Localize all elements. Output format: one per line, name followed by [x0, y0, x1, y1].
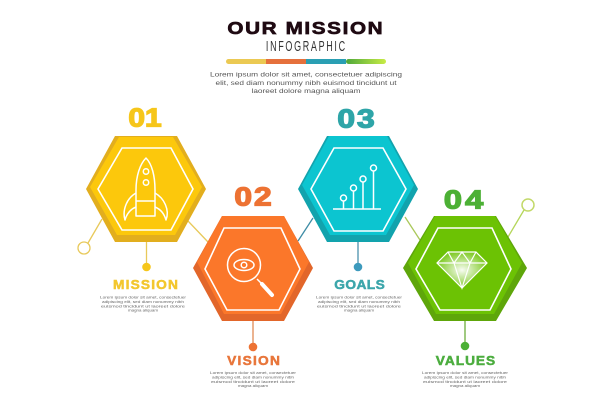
text block: euismod tincidunt ut laoreet dolore	[211, 379, 296, 384]
text block: adipiscing elit, sed diam nonummy nibh	[424, 374, 506, 380]
colour bar	[226, 59, 386, 64]
number 01: 01	[128, 103, 162, 132]
panel: vision	[193, 183, 313, 388]
panel: mission	[78, 103, 206, 312]
text block: Lorem ipsum dolor sit amet, consectetuer	[316, 294, 403, 300]
text block: magna aliquam	[238, 383, 269, 388]
pin	[142, 242, 151, 271]
intro text: laoreet dolore magna aliquam	[252, 88, 361, 95]
icon: magnifier with eye	[228, 248, 272, 295]
text block: Lorem ipsum dolor sit amet, consectetuer	[100, 294, 187, 300]
text block	[316, 294, 403, 312]
title: OUR MISSION	[227, 18, 383, 39]
icon: rocket	[124, 158, 167, 220]
heading: VISION	[227, 354, 280, 368]
heading: VALUES	[436, 354, 495, 368]
intro text: Lorem ipsum dolor sit amet, consectetuer adipiscing	[210, 72, 402, 78]
text block: euismod tincidunt ut laoreet dolore	[317, 304, 402, 308]
number 02: 02	[234, 183, 272, 212]
intro text: elit, sed diam nonummy nibh euismod tincidunt ut	[216, 80, 397, 87]
text block: Lorem ipsum dolor sit amet, consectetuer	[210, 370, 297, 375]
number 04: 04	[444, 186, 484, 215]
heading: MISSION	[113, 278, 178, 292]
ring node	[522, 199, 534, 211]
icon: diamond	[437, 252, 487, 288]
heading: GOALS	[334, 278, 385, 292]
text block: magna aliquam	[450, 383, 481, 388]
header	[210, 18, 402, 95]
connector lines	[88, 210, 524, 243]
ring node	[78, 242, 90, 254]
text block: adipiscing elit, sed diam nonummy nibh	[318, 299, 400, 304]
hexagon	[86, 136, 206, 242]
pin	[461, 321, 469, 350]
text block: magna aliquam	[344, 308, 375, 312]
hexagon	[298, 136, 418, 242]
text block: Lorem ipsum dolor sit amet, consectetuer	[422, 370, 509, 375]
panel: goals	[298, 105, 418, 312]
pin	[249, 321, 257, 351]
text block: euismod tincidunt ut laoreet dolore	[423, 379, 508, 384]
text block	[100, 294, 187, 312]
hexagon	[193, 216, 313, 321]
panel: values	[403, 186, 534, 388]
text block: magna aliquam	[128, 308, 159, 312]
text block	[210, 370, 297, 388]
subtitle: INFOGRAPHIC	[266, 38, 345, 55]
text block	[422, 370, 509, 388]
text block: euismod tincidunt ut laoreet dolore	[101, 304, 186, 308]
icon: growth chart	[333, 165, 381, 209]
text block: adipiscing elit, sed diam nonummy nibh	[102, 299, 184, 304]
pin	[354, 242, 362, 271]
text block: adipiscing elit, sed diam nonummy nibh	[212, 374, 294, 380]
hexagon	[403, 216, 527, 321]
intro text	[210, 72, 402, 95]
number 03: 03	[337, 105, 375, 134]
